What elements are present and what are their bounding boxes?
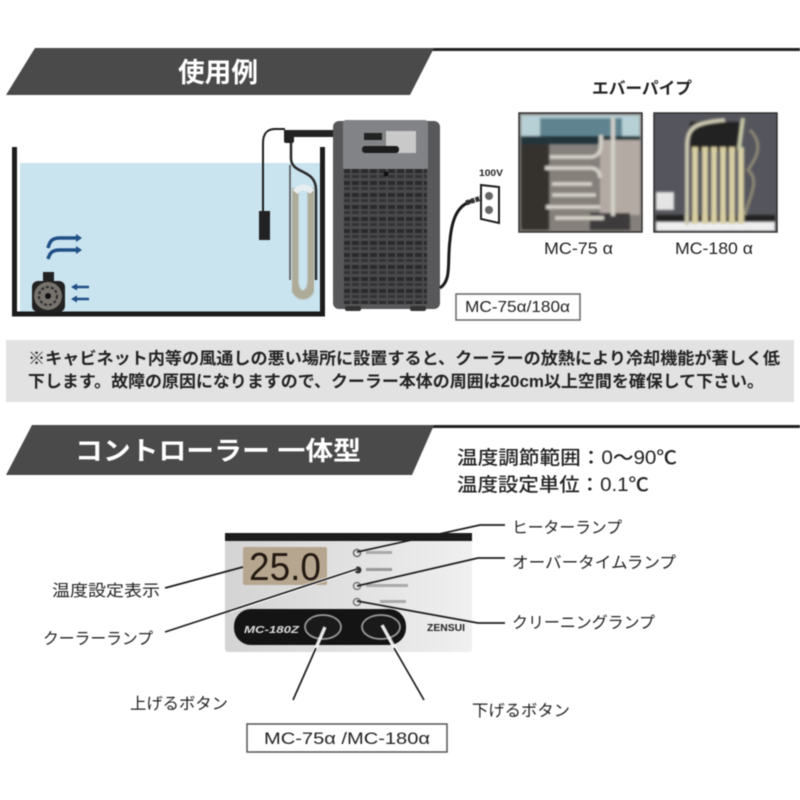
- label: クリーニングランプ: クリーニングランプ: [512, 614, 655, 632]
- label: クーラーランプ: クーラーランプ: [43, 630, 153, 648]
- model box: MC-75α/180α: MC-75α/180α: [465, 299, 570, 316]
- icon: temperature sensor: [259, 129, 285, 240]
- aquarium tank with water: [14, 147, 322, 314]
- label: ヒーターランプ: ヒーターランプ: [512, 519, 622, 537]
- spec: temperature unit: 温度設定単位：0.1℃: [457, 474, 649, 496]
- model box: MC-75α/MC-180α: MC-75α /MC-180α: [264, 729, 430, 748]
- header: 使用例: 使用例: [178, 58, 258, 88]
- label: オーバータイムランプ: オーバータイムランプ: [512, 554, 676, 572]
- model box: MC-75α/180α: [456, 294, 580, 320]
- model box: MC-75α/MC-180α: [247, 724, 447, 752]
- note panel: [6, 340, 794, 402]
- button strip: [234, 609, 406, 645]
- header: コントローラー 一体型: コントローラー 一体型: [75, 436, 361, 466]
- icon: plug and outlet: [466, 185, 499, 223]
- power cord: [440, 201, 472, 288]
- note panel: ※キャビネット内等の風通しの悪い場所に設置すると、クーラーの放熱により冷却機能が著しく低: [28, 348, 781, 368]
- photo: MC-75α evaporator: [519, 113, 642, 232]
- heading: エバーパイプ: エバーパイプ: [592, 79, 692, 98]
- header: 使用例: [6, 48, 800, 95]
- label: 上げるボタン: 上げるボタン: [130, 695, 228, 713]
- LCD display: 25.0: [249, 546, 321, 589]
- controller panel: [225, 533, 472, 652]
- logo: ZENSUI: ZENSUI: [427, 623, 465, 634]
- icon: water pump: [32, 272, 65, 312]
- photo: MC-180α evaporator: [654, 113, 777, 232]
- caption: MC-180α: MC-180 α: [675, 239, 753, 258]
- header: コントローラー 一体型: [6, 425, 800, 475]
- icon: intake arrows: [71, 284, 89, 302]
- spec: temperature range: 温度調節範囲：0～90℃: [457, 447, 677, 469]
- note panel: 下します。故障の原因になりますので、クーラー本体の周囲は20cm以上空間を確保して下さい。: [28, 372, 764, 391]
- icon: outflow arrows: [48, 234, 82, 259]
- label: 温度設定表示: 温度設定表示: [52, 582, 160, 600]
- label: 下げるボタン: 下げるボタン: [472, 702, 570, 720]
- caption: MC-75α: MC-75 α: [544, 239, 613, 258]
- button strip: MC-180Z: [244, 625, 300, 636]
- leader lines: [165, 525, 505, 700]
- chiller unit: [333, 120, 440, 311]
- icon: evaporator pipe: [284, 130, 334, 295]
- label: 100V: 100V: [479, 168, 503, 178]
